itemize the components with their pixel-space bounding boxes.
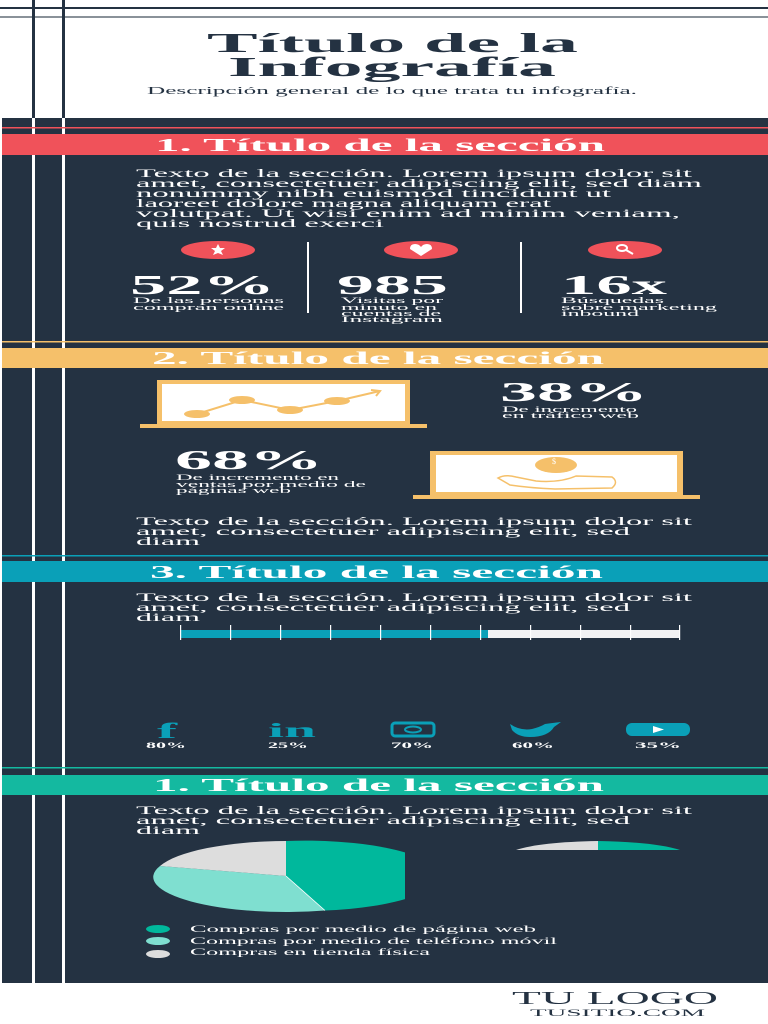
section 3 heading: 3. Título de la sección bbox=[150, 562, 603, 582]
legend: Compras por medio de página web bbox=[190, 924, 537, 934]
stat: 985: Instagram bbox=[341, 315, 445, 324]
legend bbox=[146, 924, 558, 958]
stat: 16x: Búsquedas bbox=[561, 296, 664, 305]
subtitle: Descripción general de lo que trata tu infografía. bbox=[147, 86, 637, 97]
section 1 text bbox=[136, 168, 702, 230]
stat: 68%: De incremento en bbox=[176, 473, 339, 482]
section 3 text bbox=[136, 592, 694, 624]
title: Infografía bbox=[228, 52, 557, 82]
laptop: hand with coin: $ bbox=[552, 457, 556, 466]
section 2 heading bbox=[2, 348, 768, 368]
footer logo: TU LOGO bbox=[512, 988, 718, 1008]
icon: twitter bbox=[510, 722, 561, 750]
section 3 bbox=[2, 555, 768, 750]
icon: facebook: 80% bbox=[146, 741, 186, 750]
section 2 text: Texto de la sección. Lorem ipsum dolor sit bbox=[136, 516, 694, 528]
pie chart bbox=[153, 840, 405, 912]
stat: 16x: inbound bbox=[561, 309, 639, 318]
section 3 heading bbox=[2, 561, 768, 582]
section 4 text: amet, consectetuer adipiscing elit, sed bbox=[136, 815, 631, 827]
stat: 52% bbox=[130, 270, 285, 312]
progress bar bbox=[180, 625, 680, 640]
small half pie bbox=[516, 841, 680, 850]
dividers bbox=[307, 242, 309, 313]
section 4 text: diam bbox=[136, 825, 200, 837]
section 3 text: amet, consectetuer adipiscing elit, sed bbox=[136, 602, 631, 614]
title bbox=[207, 28, 579, 82]
icon: twitter: 60% bbox=[512, 741, 554, 750]
icon: heart bbox=[384, 241, 458, 259]
stat: 985: cuentas de bbox=[341, 309, 442, 318]
stat: 985: Visitas por bbox=[341, 296, 444, 305]
icon: instagram bbox=[391, 723, 434, 750]
icon: linkedin: in bbox=[268, 720, 316, 742]
section 3 text: Texto de la sección. Lorem ipsum dolor sit bbox=[136, 592, 694, 604]
footer logo: TUSITIO.COM bbox=[530, 1008, 705, 1018]
section 1 heading: 1. Título de la sección bbox=[155, 135, 605, 155]
legend: Compras en tienda física bbox=[190, 947, 430, 957]
section 4 bbox=[2, 767, 768, 958]
section 4 text bbox=[136, 805, 694, 837]
section 1 bbox=[2, 127, 768, 324]
section 2 bbox=[2, 341, 768, 548]
section 1 text: quis nostrud exerci bbox=[136, 218, 384, 230]
icon: linkedin: 25% bbox=[268, 741, 308, 750]
stat: 16x: sobre marketing bbox=[561, 303, 717, 312]
footer logo bbox=[512, 988, 718, 1018]
icon: instagram: 70% bbox=[391, 741, 433, 750]
vertical lines bbox=[32, 0, 65, 983]
icon: linkedin bbox=[268, 720, 316, 750]
stat: 52%: 52% bbox=[130, 270, 275, 300]
section 4 text: Texto de la sección. Lorem ipsum dolor sit bbox=[136, 805, 694, 817]
stat: 52%: compran online bbox=[133, 303, 285, 312]
section 2 heading: 2. Título de la sección bbox=[152, 348, 604, 368]
section 4 heading bbox=[2, 775, 768, 795]
section 2 text: diam bbox=[136, 536, 200, 548]
icon: facebook bbox=[146, 718, 186, 750]
stat: 52%: De las personas bbox=[133, 296, 284, 305]
stat: 985: minuto en bbox=[341, 303, 437, 312]
icon: youtube bbox=[626, 723, 690, 750]
stat: 38%: 38% bbox=[500, 377, 648, 407]
icon: search bbox=[588, 241, 662, 259]
stat: 68%: páginas web bbox=[176, 486, 291, 495]
laptop: hand with coin bbox=[413, 451, 700, 499]
stat: 68%: 68% bbox=[175, 445, 323, 475]
section 1 text: volutpat. Ut wisi enim ad minim veniam, bbox=[136, 208, 680, 220]
laptop: line chart bbox=[140, 380, 427, 428]
icon: star bbox=[181, 241, 255, 259]
section 1 text: Texto de la sección. Lorem ipsum dolor sit bbox=[136, 168, 694, 180]
section 1 text: amet, consectetuer adipiscing elit, sed diam bbox=[136, 178, 702, 190]
icon: youtube: 35% bbox=[635, 741, 681, 750]
stat: 38%: en tráfico web bbox=[502, 411, 639, 420]
section 1 heading bbox=[2, 134, 768, 155]
section 4 heading: 1. Título de la sección bbox=[153, 775, 604, 795]
section 2 text: amet, consectetuer adipiscing elit, sed bbox=[136, 526, 631, 538]
icon: facebook: f bbox=[157, 718, 179, 743]
stat: 16x: 16x bbox=[561, 270, 668, 300]
stat: 38% bbox=[500, 377, 648, 420]
section 1 text: laoreet dolore magna aliquam erat bbox=[136, 198, 553, 210]
stat: 985 bbox=[337, 270, 448, 324]
section 3 text: diam bbox=[136, 612, 200, 624]
stat: 985: 985 bbox=[337, 270, 448, 300]
top decorative lines bbox=[0, 7, 768, 18]
stat: 68%: ventas por medio de bbox=[176, 480, 367, 489]
title: Título de la bbox=[207, 28, 579, 58]
legend: Compras por medio de teléfono móvil bbox=[190, 936, 558, 946]
section 2 text bbox=[136, 516, 694, 548]
stat: 16x bbox=[561, 270, 717, 318]
stat: 38%: De incremento bbox=[502, 405, 637, 414]
section 1 text: nonummy nibh euismod tincidunt ut bbox=[136, 188, 613, 200]
stat: 68% bbox=[175, 445, 367, 495]
